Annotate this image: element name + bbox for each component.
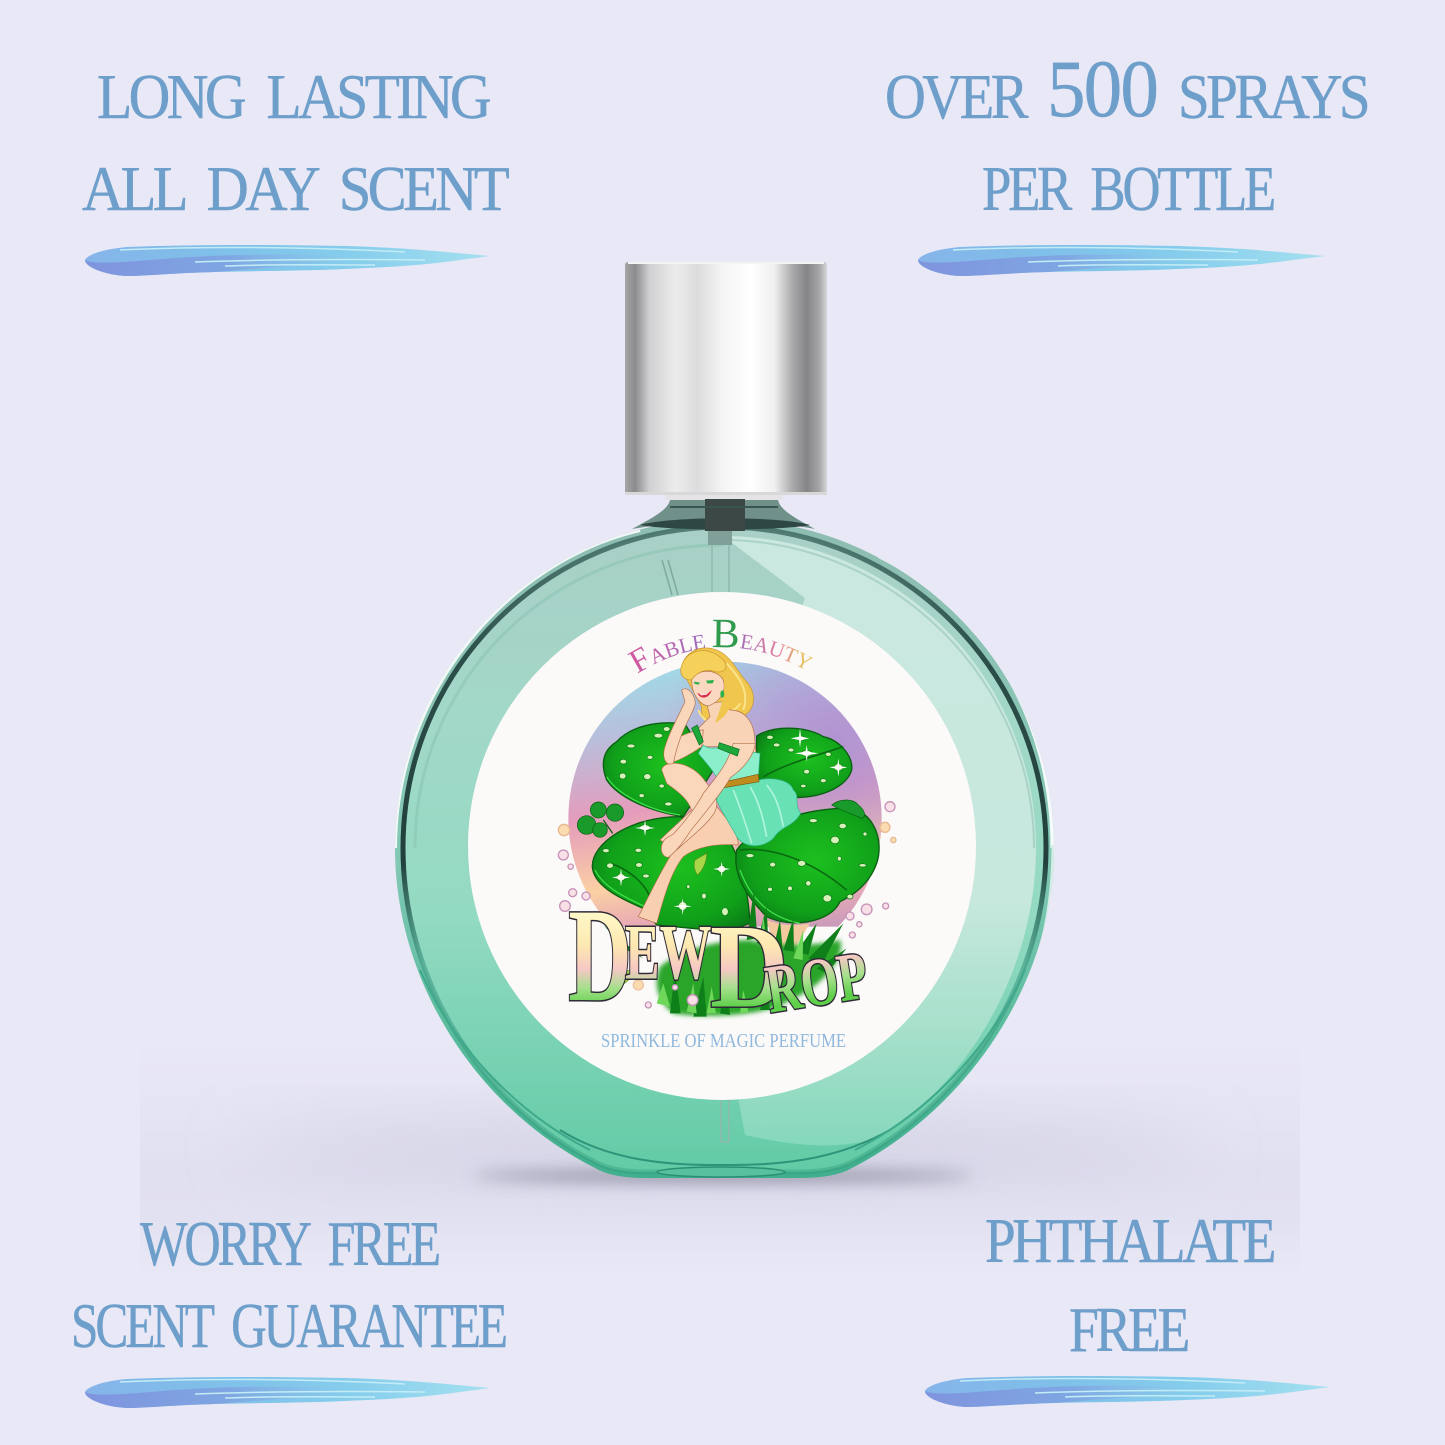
heading: over 500 sprays per bottle: OVER: [885, 61, 1029, 132]
brush stroke: bottom left: [85, 1377, 490, 1408]
far leg: [638, 807, 738, 923]
bottle glass: [390, 510, 1060, 1190]
face details: [694, 680, 714, 685]
product name: dew drop: ROP: [760, 937, 873, 1027]
heading: worry free scent guarantee: [71, 1208, 506, 1361]
bottle label: [468, 592, 976, 1100]
perfume bottle: [390, 262, 1060, 1190]
brush stroke: top left: [85, 245, 490, 276]
product name: dew drop: EW: [625, 908, 712, 995]
heading: worry free scent guarantee: WORRY FREE: [140, 1208, 439, 1279]
straps: [692, 725, 739, 756]
shoe: [694, 853, 707, 875]
torso: [698, 702, 757, 758]
dress: [698, 745, 801, 846]
head: [692, 671, 724, 706]
bubbles: [558, 802, 896, 1008]
heading: phthalate free: FREE: [1069, 1294, 1188, 1365]
grass: [603, 890, 847, 1017]
arms: [664, 730, 703, 763]
heading: over 500 sprays per bottle: [885, 43, 1367, 224]
sky circle: [568, 662, 882, 927]
inner liquid: [403, 527, 1046, 1172]
bottle cap: [625, 262, 827, 495]
front hair: [681, 651, 726, 680]
brush stroke: bottom right: [925, 1376, 1330, 1407]
heading: long lasting all day scent: ALL DAY SCENT: [82, 153, 510, 224]
bottle neck: [632, 495, 815, 545]
product name: dew drop: D: [568, 881, 632, 1029]
heading: over 500 sprays per bottle: SPRAYS: [1178, 61, 1367, 132]
heading: phthalate free: [985, 1205, 1274, 1365]
near leg: [660, 763, 717, 850]
label illustration: [558, 620, 897, 1033]
product name: dew drop: D: [710, 900, 788, 1033]
fairy figure: [638, 648, 801, 923]
heading: over 500 sprays per bottle: PER BOTTLE: [982, 153, 1274, 224]
heading: long lasting all day scent: [82, 61, 510, 224]
heading: over 500 sprays per bottle: 500: [1047, 43, 1157, 134]
tagline: sprinkle of magic perfume: SPRINKLE OF MAGIC PERFUME: [601, 1030, 846, 1052]
product name: dew drop: [568, 881, 873, 1033]
dew drops on leaves: [603, 727, 867, 916]
dip tube: [662, 532, 729, 1142]
floor shadow: [140, 1030, 1300, 1290]
small clover: [577, 800, 865, 837]
brush stroke: top right: [918, 245, 1325, 276]
heading: long lasting all day scent: LONG LASTING: [97, 61, 491, 132]
heading: worry free scent guarantee: SCENT GUARANTEE: [71, 1290, 506, 1361]
heading: phthalate free: PHTHALATE: [985, 1205, 1274, 1276]
hair strands: [698, 663, 745, 724]
back hair: [682, 648, 753, 725]
brand name: fable beauty: FABLE BEAUTY: [627, 620, 814, 674]
clover leaves: [592, 723, 879, 932]
sparkles: [612, 728, 847, 915]
